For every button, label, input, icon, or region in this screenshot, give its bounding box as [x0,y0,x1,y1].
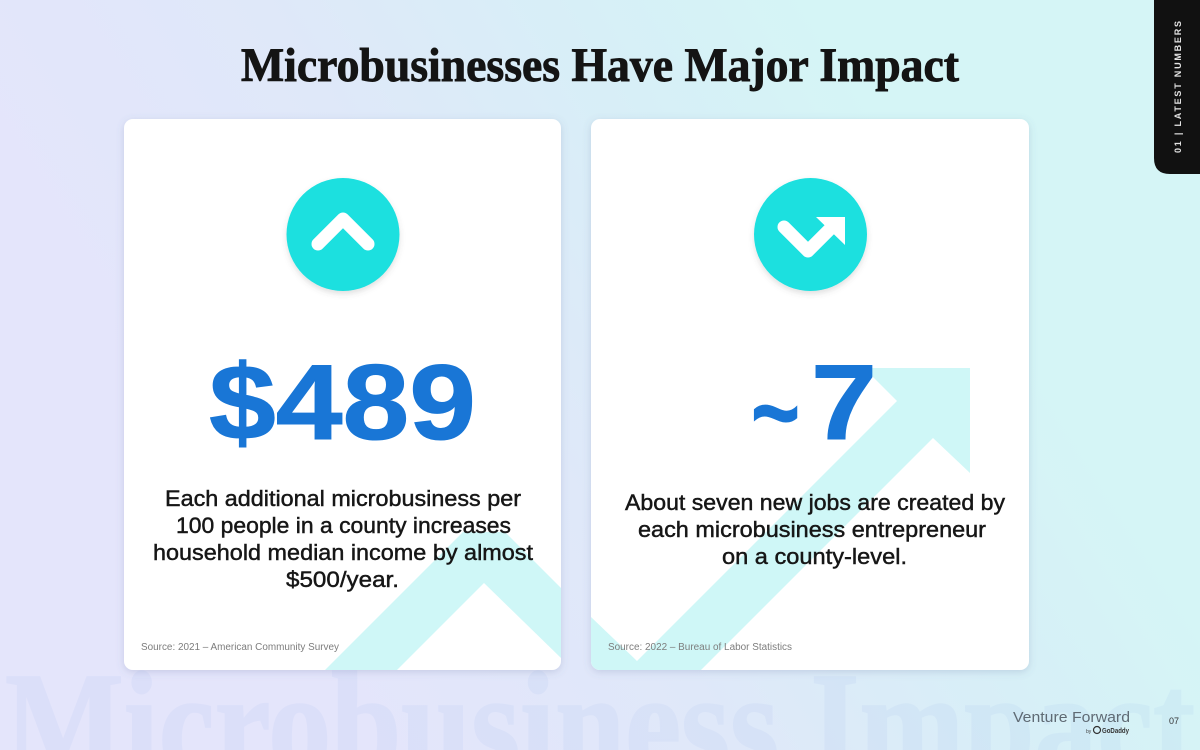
source: card two: Source: 2022 – Bureau of Labor Statistics [608,642,792,653]
big number: ~7 [751,342,877,472]
footer logo: Venture Forward [1013,709,1130,726]
description: jobs: each microbusiness entrepreneur [638,517,986,542]
description: income: Each additional microbusiness per [165,486,521,511]
description: income: $500/year. [286,567,399,592]
description: income: 100 people in a county increases [176,513,511,538]
description: income [153,486,533,592]
page number: 07 [1169,716,1179,726]
big number: $489: $489 [209,342,476,462]
icon: chevron up [286,178,400,291]
background arrow: card one [325,532,561,670]
description: jobs [625,490,1005,569]
section tab [1154,0,1200,174]
background arrow: card two [591,368,970,670]
footer logo: by [1086,729,1092,735]
big number: ~7: ~ [751,352,800,472]
footer logo: GoDaddy [1102,728,1129,735]
panel: household income card [124,119,561,670]
panel: job creation card [591,119,1029,670]
tab label: 01 | LATEST NUMBERS [1173,21,1183,153]
big number: ~7: 7 [811,342,877,462]
description: income: household median income by almost [153,540,533,565]
title: Microbusinesses Have Major Impact [241,39,959,92]
description: jobs: About seven new jobs are created by [625,490,1005,515]
source: card one: Source: 2021 – American Community Survey [141,642,339,653]
icon: trend arrow [754,178,867,291]
description: jobs: on a county-level. [722,544,907,569]
footer logo [1013,709,1130,735]
